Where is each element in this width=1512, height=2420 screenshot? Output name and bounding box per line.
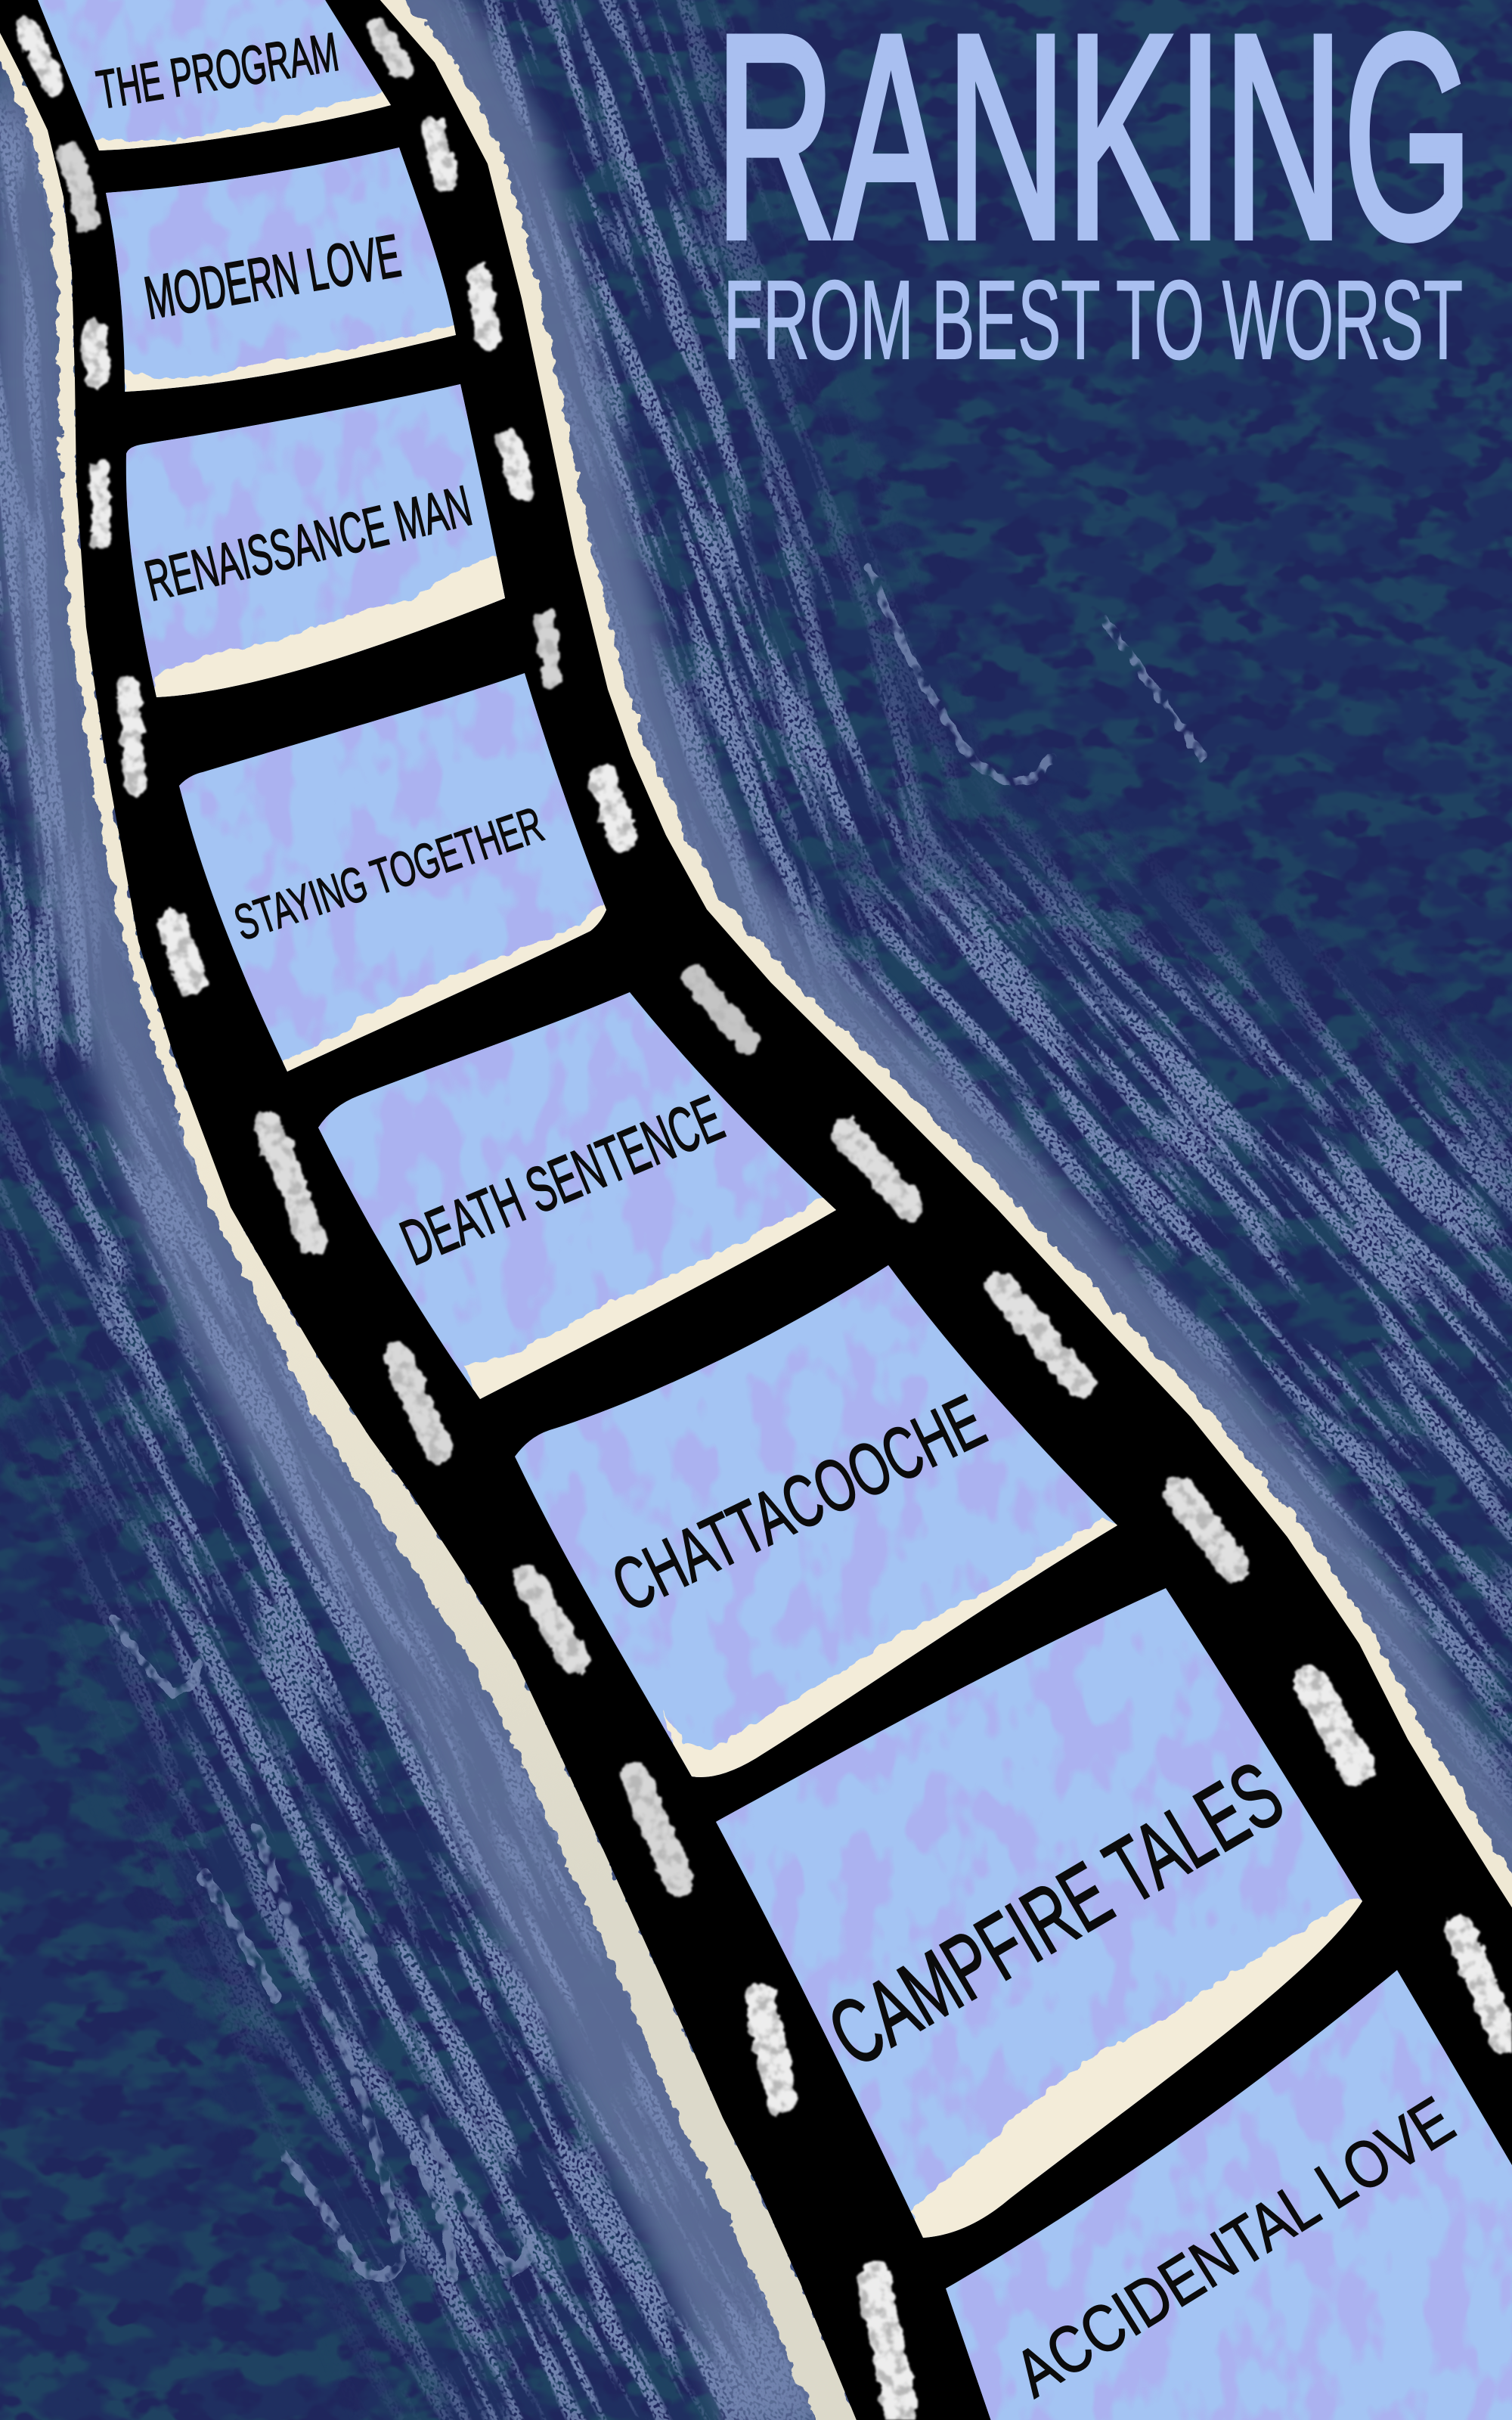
frame: The Program: [36, 0, 404, 163]
background: brush streaks lower left: [0, 894, 850, 2420]
hole: left 12: [874, 2278, 901, 2412]
hole: right 7: [694, 977, 747, 1041]
frame: Staying Together: [179, 673, 624, 1089]
frame: Renaissance Man: RENAISSANCE MAN: [139, 473, 478, 614]
hole: right 3: [479, 277, 488, 337]
hole: right 12: [1459, 1929, 1504, 2040]
hole: right 1: [378, 30, 399, 67]
hole: right 6: [603, 779, 623, 837]
frame: Chattacooche: [515, 1265, 1134, 1796]
hole: right 11: [1310, 1682, 1358, 1768]
hole: left 5: [129, 688, 136, 783]
hole: left 2: [71, 155, 88, 221]
hole: left 6: [172, 924, 192, 980]
frame: Staying Together: STAYING TOGETHER: [228, 796, 550, 951]
frame: Modern Love: [106, 147, 472, 405]
background: hand-drawn brush loops: [113, 567, 1202, 2276]
hole: left 11: [761, 2000, 782, 2099]
hole: left 4: [99, 470, 101, 540]
hole: right 2: [434, 130, 446, 178]
hole: left 1: [27, 29, 53, 83]
frame: Death Sentence: [318, 992, 850, 1422]
hole: left 8: [398, 1357, 438, 1450]
hole: left 3: [94, 333, 98, 376]
hole: left 10: [635, 1777, 679, 1882]
hole: left 7: [269, 1127, 312, 1240]
frame: Death Sentence: DEATH SENTENCE: [392, 1082, 733, 1280]
hole: right 5: [546, 620, 552, 678]
hole: right 8: [845, 1131, 910, 1207]
background: brush streaks upper left: [0, 93, 103, 1073]
background: brush streaks upper right: [0, 0, 1512, 1927]
frame: Renaissance Man: [126, 384, 522, 711]
frame: Chattacooche: CHATTACOOCHE: [600, 1379, 997, 1627]
hole: right 4: [510, 443, 522, 490]
frame: Modern Love: MODERN LOVE: [140, 222, 405, 332]
hole: left 9: [528, 1579, 575, 1661]
hole: right 10: [1179, 1493, 1235, 1566]
hole: right 9: [999, 1286, 1080, 1384]
frame: Campfire Tales: [716, 1588, 1380, 2261]
